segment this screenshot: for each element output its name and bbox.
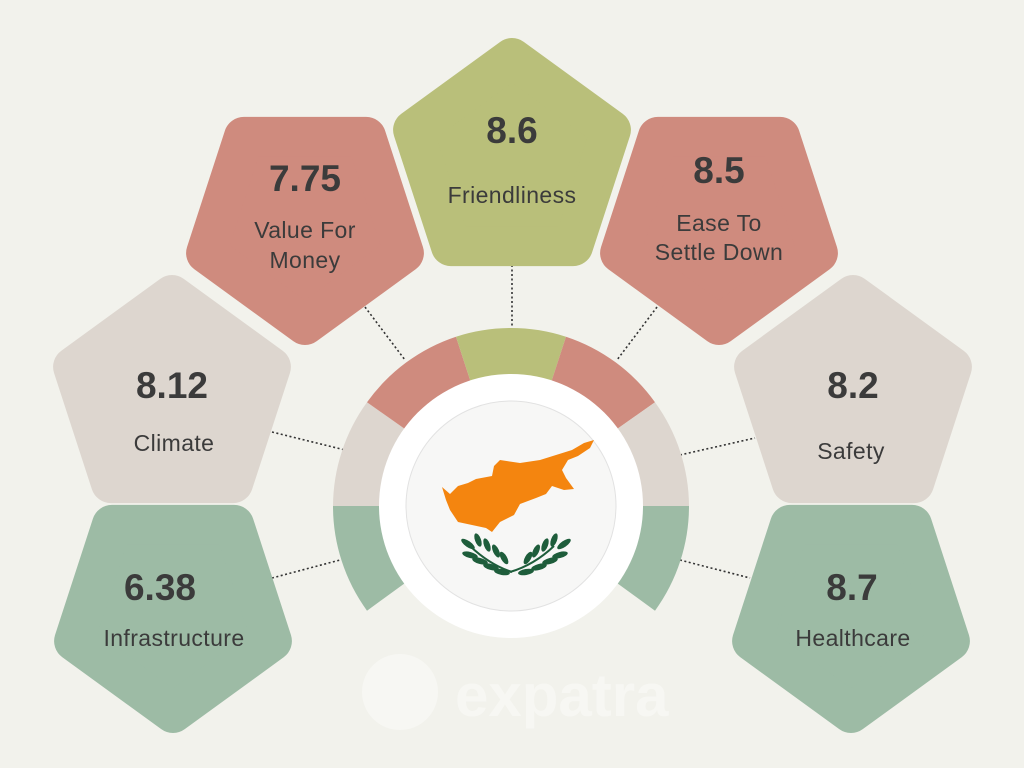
center flag circle: [379, 374, 643, 638]
panel: climate: Climate: [134, 430, 214, 456]
panel: friendliness: [413, 58, 611, 246]
panel: safety: Safety: [817, 438, 885, 464]
panel: ease to settle down: Settle Down: [655, 239, 783, 265]
panel: healthcare: [752, 525, 950, 713]
panel: ease to settle down: Ease To: [676, 210, 762, 236]
panel: infrastructure: [74, 525, 272, 713]
panel: friendliness: Friendliness: [448, 182, 576, 208]
panel: ease to settle down: [620, 137, 818, 325]
panel: value for money: Money: [269, 247, 341, 273]
panel: value for money: Value For: [254, 217, 356, 243]
panel: ease to settle down: 8.5: [693, 150, 745, 191]
watermark logo: [362, 654, 669, 730]
connector lines: [272, 265, 755, 578]
ring segments: [333, 328, 689, 611]
icon: olive branches: [460, 532, 572, 576]
panel: value for money: [206, 137, 404, 325]
panel: healthcare: 8.7: [826, 567, 878, 608]
panel: climate: 8.12: [136, 365, 208, 406]
panel: infrastructure: Infrastructure: [103, 625, 245, 651]
panel: safety: [754, 295, 952, 483]
panel: friendliness: 8.6: [486, 110, 538, 151]
panel: healthcare: Healthcare: [795, 625, 911, 651]
icon: cyprus map: [442, 440, 594, 532]
watermark logo: expatra: [455, 662, 669, 729]
panel: value for money: 7.75: [269, 158, 341, 199]
panel: safety: 8.2: [827, 365, 879, 406]
panel: climate: [73, 295, 271, 483]
panel: infrastructure: 6.38: [124, 567, 196, 608]
